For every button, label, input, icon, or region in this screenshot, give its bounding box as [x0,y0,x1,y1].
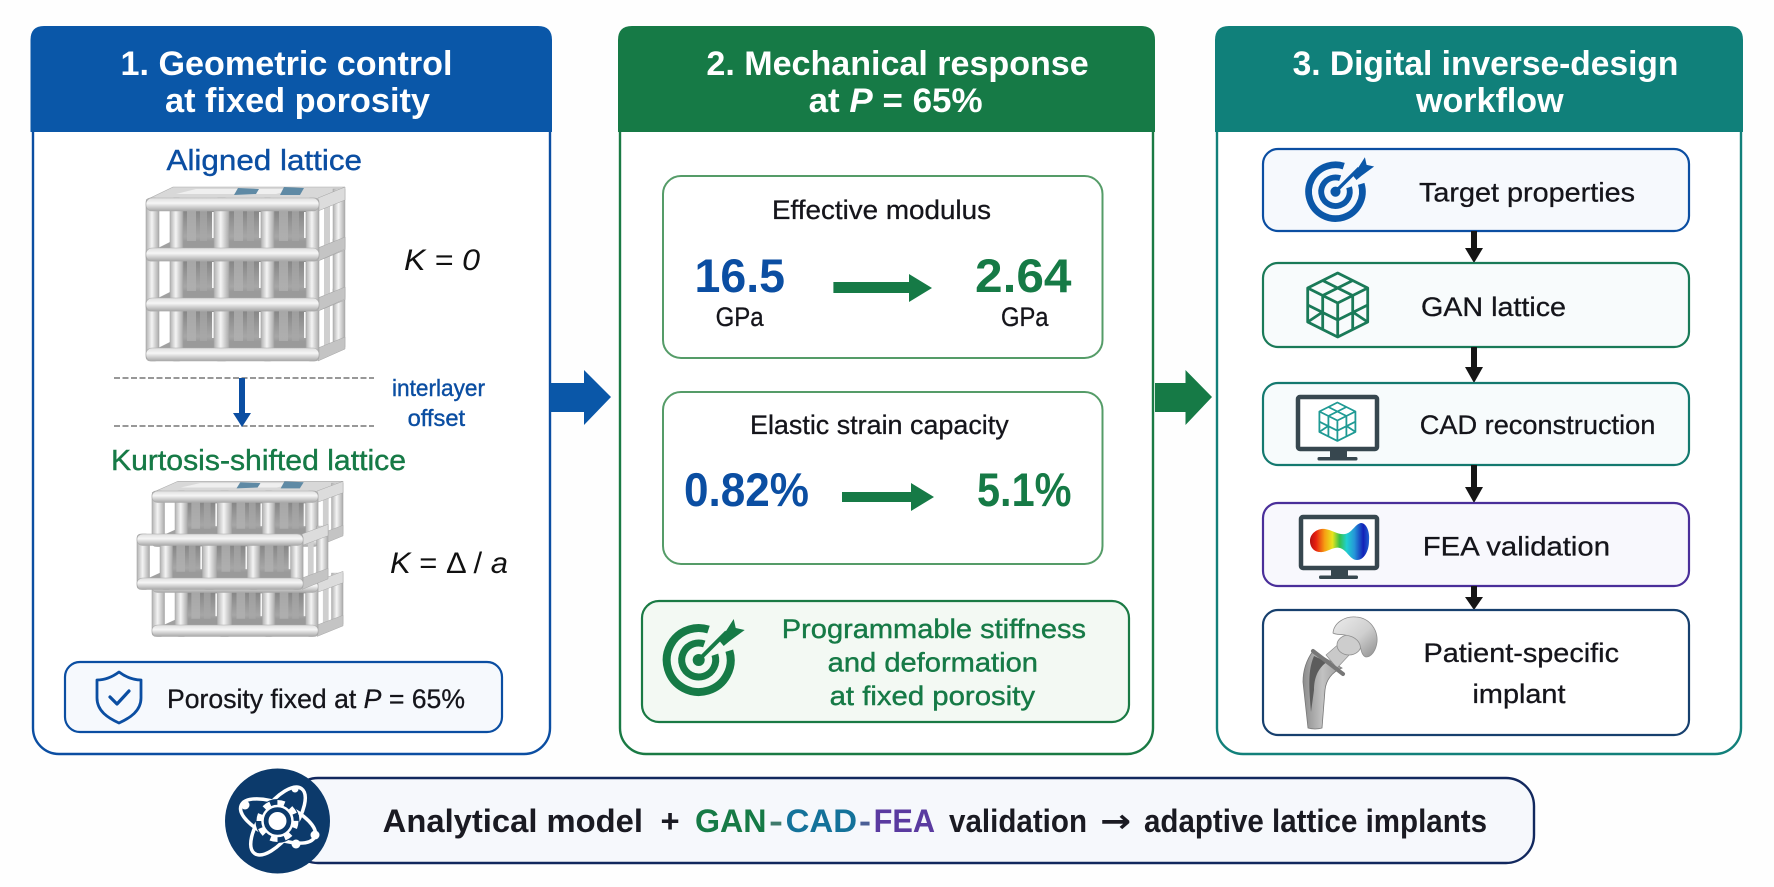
value before: 0.82%: 0.82% [684,463,809,516]
step label [1424,638,1619,709]
step: GAN lattice [1263,263,1689,347]
icon: hip implant [1303,617,1377,729]
card: effective modulus [663,176,1102,358]
banner text: - [859,803,871,839]
panel 1 header: 1. Geometric control [120,45,452,83]
formula K = delta / a: K = Δ / a [390,547,508,580]
step: FEA validation: FEA validation [1423,532,1610,562]
value after: 5.1%: 5.1% [977,463,1072,516]
step: target properties [1263,149,1689,231]
card: elastic strain capacity: Elastic strain capacity [750,410,1009,440]
heading: aligned lattice: Aligned lattice [166,145,362,177]
banner text: + [660,803,680,839]
arrow: modulus change [833,274,932,302]
label: interlayer offset [392,375,485,431]
banner text: GAN [695,803,766,839]
callout text: Programmable stiffness [782,614,1086,644]
callout: porosity fixed [65,662,502,732]
value before: 16.5 GPa: 16.5 [694,249,785,302]
panel 1: geometric control [30,26,552,754]
step: target properties: Target properties [1419,178,1635,208]
callout text: and deformation [828,648,1038,678]
arrow: panel 1 to panel 2 [550,370,611,425]
arrow: panel 2 to panel 3 [1155,370,1212,425]
icon: blue target [1302,157,1374,225]
icon: monitor with lattice [1298,397,1377,460]
card: effective modulus: Effective modulus [772,195,991,225]
arrow: step 3 to 4 [1465,465,1483,503]
step label: Patient-specific [1424,638,1619,668]
panel 2 header: 2. Mechanical response [706,45,1089,83]
card: elastic strain capacity [663,392,1102,564]
callout text: at fixed porosity [830,681,1036,711]
panel 3: digital inverse-design workflow [1215,26,1743,754]
kurtosis-shifted lattice illustration [137,481,343,636]
arrow: step 4 to 5 [1465,586,1483,610]
aligned lattice illustration [146,187,345,361]
step: GAN lattice: GAN lattice [1421,292,1566,322]
banner text: adaptive lattice implants [1144,803,1487,839]
banner text: validation [949,803,1087,839]
value before: 16.5 GPa [694,249,785,332]
step: FEA validation [1263,503,1689,586]
callout text: Porosity fixed at P = 65% [167,684,465,714]
panel 3 header: workflow [1415,82,1564,120]
banner text: CAD [786,803,857,839]
icon: shield check [97,672,141,723]
banner text: Analytical model [383,803,643,839]
callout text [782,614,1086,711]
step: CAD reconstruction: CAD reconstruction [1420,410,1655,440]
value before: 16.5 GPa: GPa [716,302,764,332]
icon: atom with gear [225,768,330,874]
callout: programmable stiffness [642,601,1129,722]
banner text: FEA [874,803,935,839]
panel 1 header: at fixed porosity [165,82,430,120]
formula K = 0: K = 0 [404,244,480,277]
heading: kurtosis-shifted lattice: Kurtosis-shifted lattice [111,445,406,477]
arrow: step 2 to 3 [1465,347,1483,383]
icon: monitor with stress map [1301,517,1377,579]
panel 3 header: 3. Digital inverse-design [1293,45,1678,83]
panel 2: mechanical response [618,26,1155,754]
arrow: strain change [842,483,934,511]
banner text: → [1100,802,1131,840]
banner text [383,802,1487,840]
label: interlayer offset: offset [408,405,466,431]
icon: green target [659,619,745,700]
step label: implant [1472,679,1566,709]
step: patient-specific implant [1263,610,1689,735]
interlayer offset indicator [114,378,374,427]
step: CAD reconstruction [1263,383,1689,465]
panel 2 header: at P = 65% [809,82,983,120]
value after: 2.64 GPa: GPa [1001,302,1049,332]
panel 1 header [30,26,552,132]
icon: green lattice cube [1308,273,1368,337]
banner text: - [769,803,783,839]
panel 2 header [618,26,1155,132]
bottom banner [225,768,1534,874]
arrow: step 1 to 2 [1465,231,1483,263]
panel 3 header [1215,26,1743,132]
label: interlayer offset: interlayer [392,375,485,401]
value after: 2.64 GPa [975,249,1072,332]
value after: 2.64 GPa: 2.64 [975,249,1072,302]
